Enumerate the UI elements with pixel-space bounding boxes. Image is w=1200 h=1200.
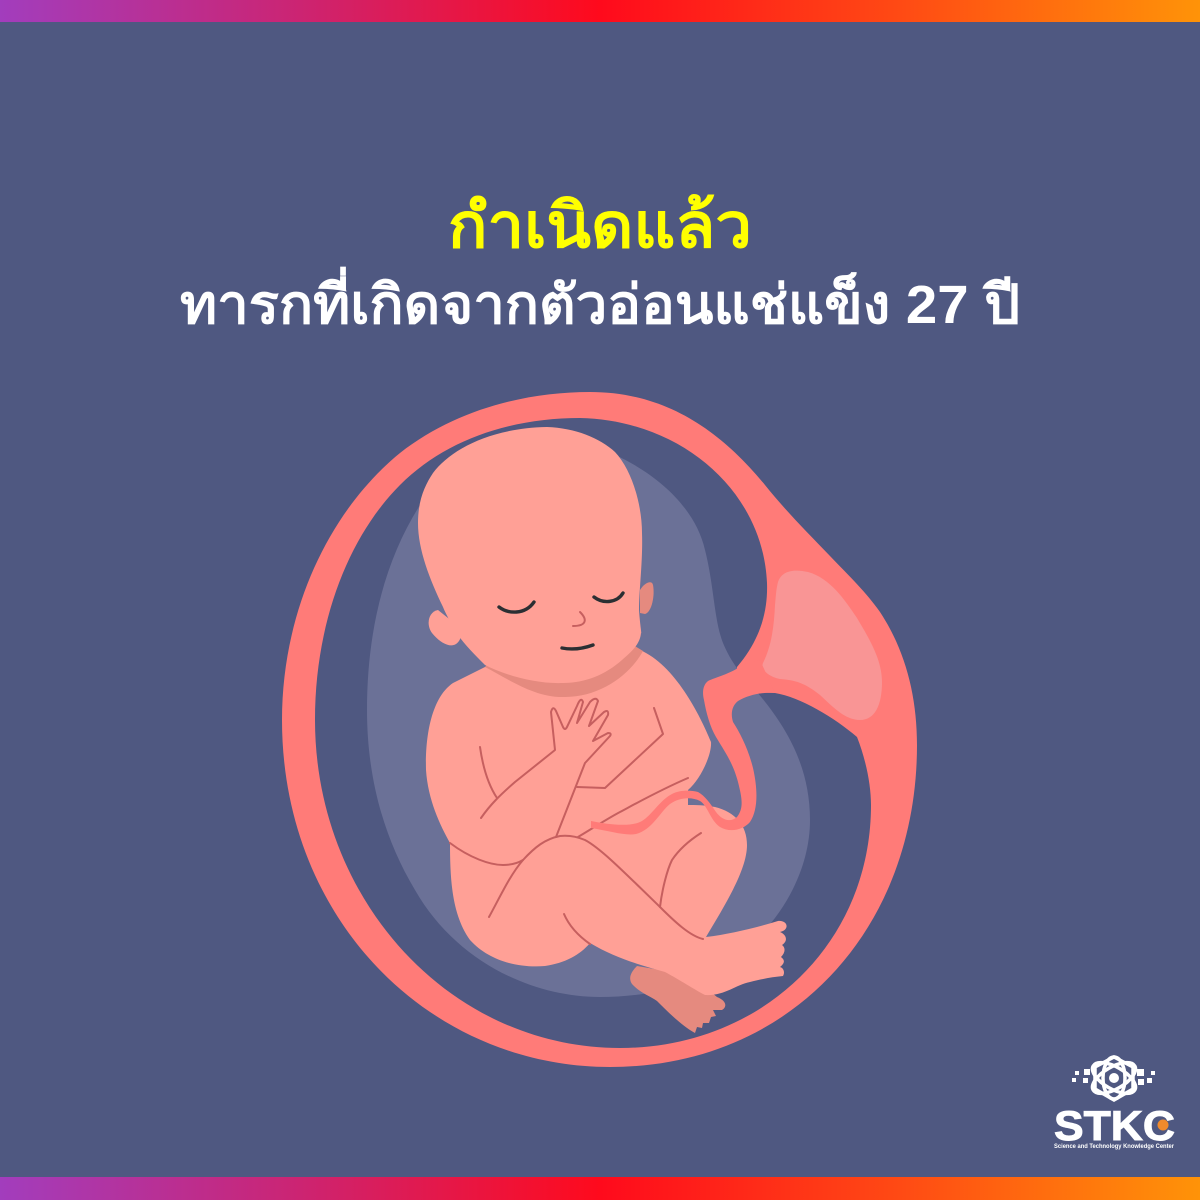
placenta [762, 571, 882, 720]
baby body [426, 650, 787, 995]
nose [573, 612, 585, 626]
top gradient bar [0, 0, 1200, 22]
umbilical cord [591, 660, 775, 834]
body contour lines [450, 612, 703, 944]
forearm [577, 708, 663, 788]
arm and hand [481, 699, 611, 837]
ear right [640, 582, 654, 614]
neck shadow [485, 640, 643, 697]
head [418, 427, 642, 683]
logo: STKC [1054, 1056, 1175, 1150]
logo icon: atom [1088, 1056, 1140, 1100]
bottom gradient bar [0, 1177, 1200, 1200]
heading: yellow: กำเนิดแล้ว [448, 192, 752, 261]
title [180, 192, 1020, 335]
knee [564, 914, 590, 944]
womb wall [282, 392, 917, 1067]
thigh upper [489, 836, 703, 939]
illustration: fetus in womb [282, 392, 917, 1067]
logo tagline: Science and Technology Knowledge Center [1054, 1144, 1175, 1150]
calf inner [660, 833, 701, 907]
eyes and mouth [499, 593, 623, 649]
logo pixel squares [1072, 1069, 1155, 1085]
logo dot [1158, 1120, 1168, 1130]
ear left [429, 610, 461, 645]
waist [450, 843, 523, 865]
logo wordmark: STKC [1054, 1102, 1175, 1149]
hidden foot [630, 966, 725, 1033]
heading: white: ทารกที่เกิดจากตัวอ่อนแช่แข็ง 27 ปี [180, 266, 1020, 335]
amniotic sac [367, 440, 810, 997]
belly [578, 778, 688, 837]
